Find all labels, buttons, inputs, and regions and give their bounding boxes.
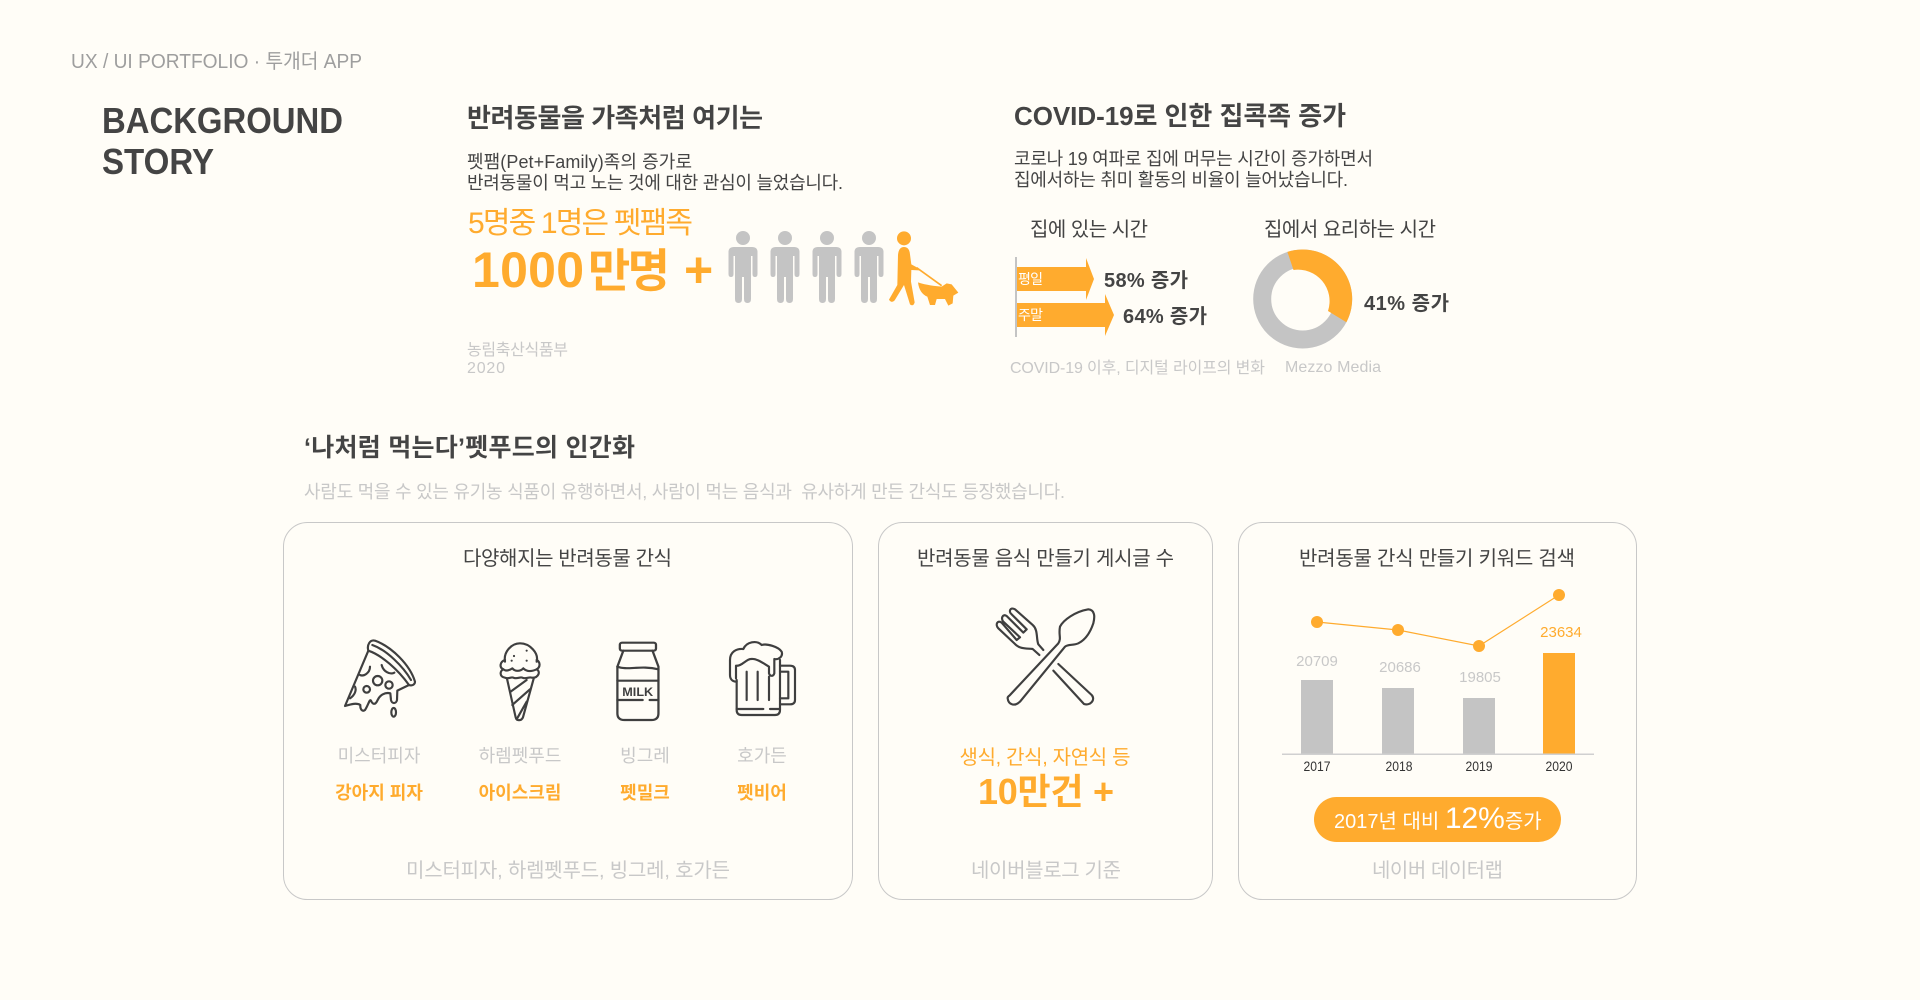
icon: person walking dog [889, 231, 958, 306]
arrow: weekday [1017, 258, 1094, 300]
item: mister pizza: 미스터피자 [338, 746, 421, 766]
panel heading: 반려동물 간식 만들기 키워드 검색 [1299, 547, 1575, 570]
item: binggrae: 빙그레 [620, 746, 670, 766]
callout: 12 percent increase: 2017년 대비 12%증가 [1334, 802, 1542, 835]
heading: humanization of pet food: ‘나처럼 먹는다’펫푸드의 인간화 [304, 434, 635, 462]
bar values: 19805 [1459, 669, 1501, 686]
panel source: 네이버블로그 기준 [971, 859, 1121, 882]
text block: pet family description: 펫팸(Pet+Family)족의 증가로 [467, 152, 692, 172]
stat: ten million: 만명 [588, 245, 670, 297]
panel: recipe posts [878, 522, 1212, 900]
label: 58 percent: 58% 증가 [1104, 269, 1188, 292]
item: hoegaarden: 호가든 [737, 746, 787, 766]
icon: ice cream [501, 643, 540, 720]
year labels: 2018 [1386, 758, 1413, 774]
text block: covid description: 집에서하는 취미 활동의 비율이 늘어났습니다. [1014, 170, 1348, 190]
text block: pet family description: 반려동물이 먹고 노는 것에 대한 관심이 늘었습니다. [467, 173, 843, 193]
chart heading: time at home: 집에 있는 시간 [1030, 218, 1148, 241]
text block: covid description [1014, 149, 1373, 190]
panel source: 네이버 데이터랩 [1372, 859, 1503, 882]
panel: pet treats [284, 522, 852, 900]
stat: one hundred thousand: 10만건 + [978, 771, 1114, 812]
icon: four gray people [728, 231, 884, 303]
icon: beer mug [730, 642, 795, 715]
bar values: 23634 [1540, 624, 1582, 641]
section: covid nesting [1010, 101, 1449, 377]
item: harlem pet food: 아이스크림 [479, 783, 561, 803]
icon: pizza [345, 640, 415, 717]
heading: covid: COVID-19로 인한 집콕족 증가 [1014, 101, 1346, 131]
icon: milk jar: MILK [622, 685, 654, 699]
item: hoegaarden [737, 746, 787, 803]
year labels: 2019 [1466, 758, 1493, 774]
panel: keyword searches [1238, 522, 1636, 900]
arrow: weekend: 주말 [1018, 307, 1043, 323]
item: hoegaarden: 펫비어 [737, 783, 787, 803]
title: background story: BACKGROUND [102, 100, 343, 141]
stat: ten million [472, 242, 713, 298]
text block: covid description: 코로나 19 여파로 집에 머무는 시간이 증가하면서 [1014, 149, 1373, 169]
icon: fork and spoon [997, 609, 1094, 705]
panel source: 미스터피자, 하렘펫푸드, 빙그레, 호가든 [406, 859, 730, 882]
title: background story [102, 100, 343, 182]
item: harlem pet food [479, 746, 561, 803]
label: 41 percent: 41% 증가 [1364, 292, 1449, 315]
bar values: 20709 [1296, 653, 1338, 670]
bar values: 20686 [1379, 659, 1421, 676]
source: ministry 2020 [467, 341, 568, 377]
item: binggrae: 펫밀크 [620, 783, 670, 803]
source: covid digital life: COVID-19 이후, 디지털 라이프의 변화 [1010, 359, 1265, 377]
item: mister pizza: 강아지 피자 [335, 783, 423, 803]
stat: one in five: 5명중 1명은 펫팸족 [468, 207, 693, 240]
label: 64 percent: 64% 증가 [1123, 305, 1207, 328]
item: binggrae [620, 746, 670, 803]
chart heading: time cooking at home: 집에서 요리하는 시간 [1264, 218, 1436, 241]
bar values [1296, 624, 1582, 686]
stat: ten million: + [684, 242, 713, 298]
stat: ten million: 1000 [472, 242, 584, 298]
source: ministry 2020: 2020 [467, 360, 505, 377]
arrow: weekday: 평일 [1018, 271, 1043, 287]
callout: 12 percent increase [1314, 797, 1561, 842]
item: harlem pet food: 하렘펫푸드 [479, 746, 561, 766]
title: background story: STORY [102, 141, 214, 182]
heading: pet family: 반려동물을 가족처럼 여기는 [467, 103, 763, 133]
year labels: 2020 [1546, 758, 1573, 774]
source: ministry 2020: 농림축산식품부 [467, 341, 568, 359]
text block: humanization description: 사람도 먹을 수 있는 유기농 식품이 유행하면서, 사람이 먹는 음식과 유사하게 만든 간식도 등장했습니다. [304, 482, 1065, 502]
panel heading: 반려동물 음식 만들기 게시글 수 [917, 547, 1174, 570]
panel heading: 다양해지는 반려동물 간식 [463, 547, 672, 570]
section: pet family [467, 103, 958, 377]
stat label: raw, snacks, natural food: 생식, 간식, 자연식 등 [960, 746, 1130, 769]
item: mister pizza [335, 746, 423, 803]
source: mezzo media: Mezzo Media [1285, 359, 1381, 376]
arrow chart: time at home [1015, 257, 1207, 337]
arrow: weekend [1017, 294, 1114, 336]
bar chart [1282, 624, 1594, 774]
donut chart: 41 percent [1262, 249, 1352, 340]
year labels [1304, 758, 1573, 774]
line chart [1311, 589, 1565, 652]
icon: milk jar [617, 643, 658, 720]
page header label: UX / UI PORTFOLIO · 투개더 APP [71, 50, 362, 73]
text block: pet family description [467, 152, 843, 193]
year labels: 2017 [1304, 758, 1331, 774]
